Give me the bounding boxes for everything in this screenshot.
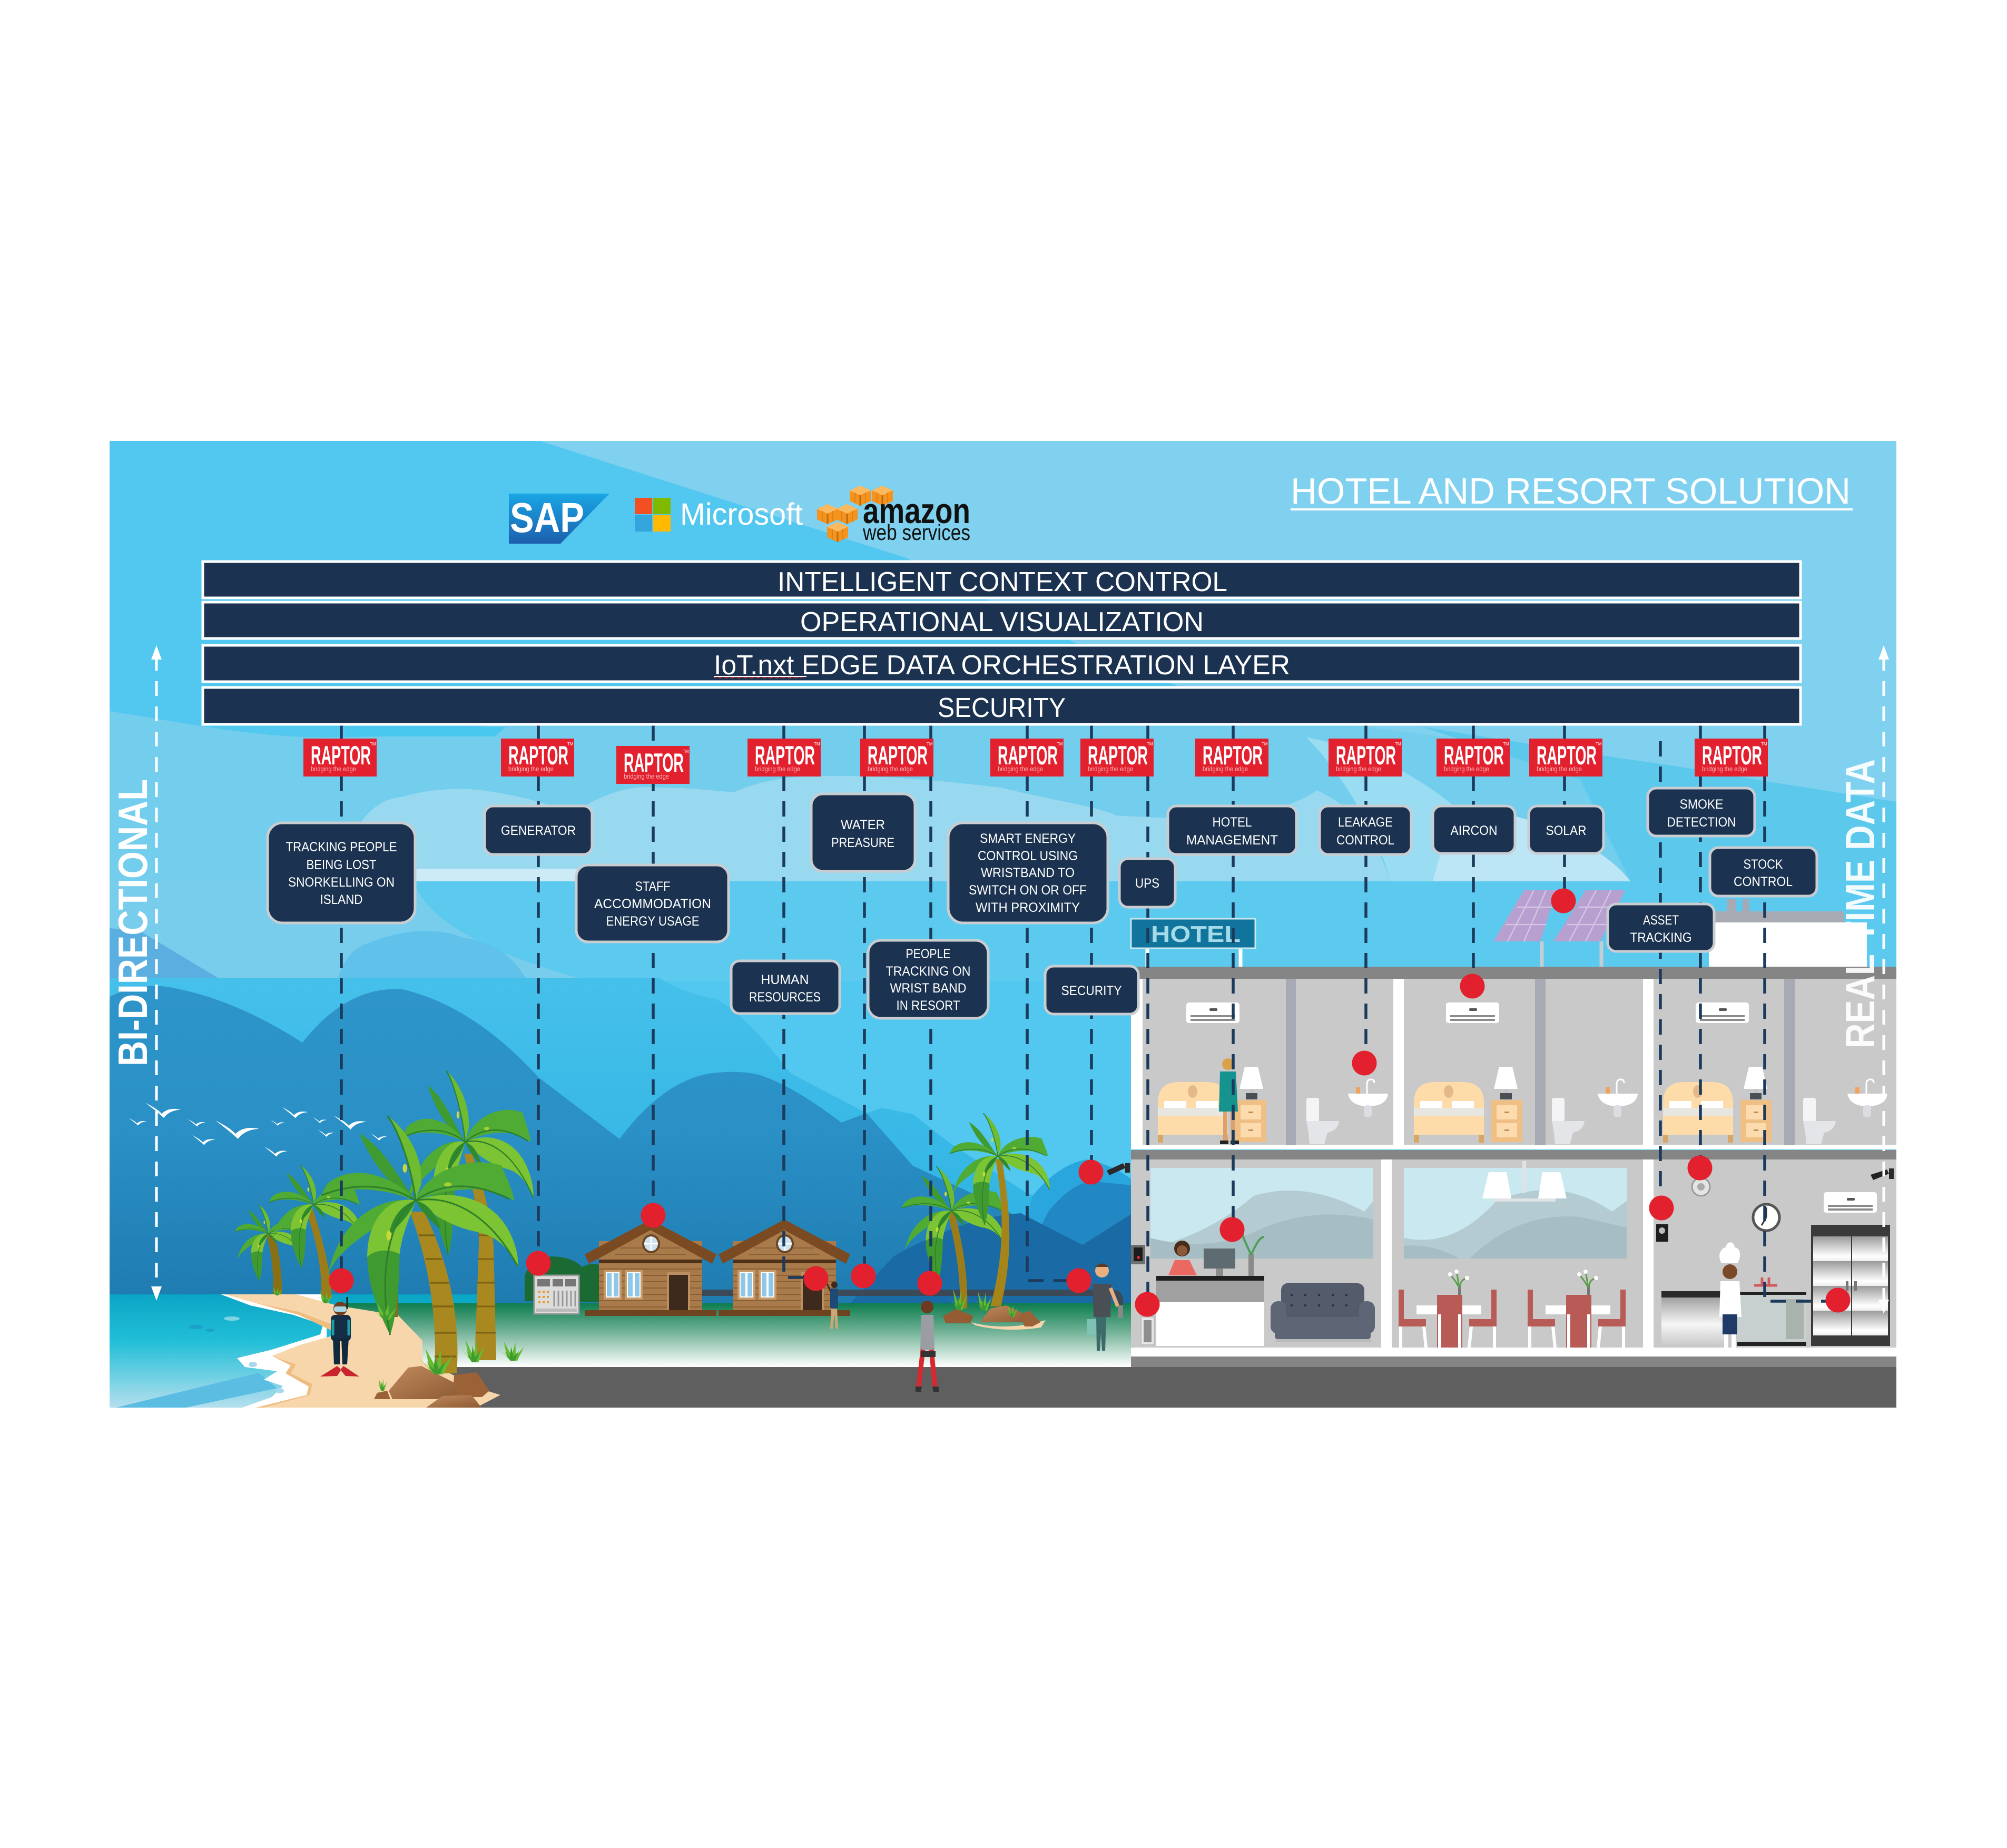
- label: smart energy control: CONTROL USING: [978, 849, 1078, 863]
- dining tables: [1399, 1270, 1626, 1348]
- badge: raptor leakage: RAPTOR: [1336, 741, 1396, 770]
- infographic: hotel and resort solution: [110, 441, 1896, 1408]
- label: asset tracking: [1608, 904, 1714, 951]
- label: staff accommodation: ENERGY USAGE: [606, 914, 700, 929]
- label: asset tracking: ASSET: [1643, 913, 1679, 928]
- label: smoke detection: DETECTION: [1667, 815, 1736, 830]
- ground: [337, 1303, 1133, 1367]
- badge: raptor hotel management: [1195, 739, 1268, 776]
- sky: [110, 441, 1896, 1195]
- layer: edge data orchestration: IoT.nxt EDGE DATA ORCHESTRATION LAYER: [714, 650, 1290, 681]
- clock: [1753, 1204, 1779, 1231]
- bi-directional arrow: [151, 645, 162, 1301]
- badge: raptor tracking: bridging the edge: [311, 765, 356, 773]
- badge: raptor aircon: RAPTOR: [1444, 741, 1504, 770]
- badge: raptor security: TM: [1147, 742, 1153, 746]
- road: [450, 1367, 1896, 1408]
- label: people tracking: PEOPLE: [906, 947, 950, 961]
- badge: raptor tracking: [303, 739, 377, 776]
- smoke detector: [1692, 1178, 1710, 1196]
- label: smart energy control: WRISTBAND TO: [981, 866, 1075, 880]
- logo: amazon web services: amazon: [863, 491, 970, 531]
- badge: raptor human resources: RAPTOR: [755, 741, 815, 770]
- badge: raptor solar: bridging the edge: [1537, 765, 1582, 773]
- hotel sign: HOTEL: [1151, 921, 1241, 947]
- label: stock control: CONTROL: [1734, 874, 1793, 889]
- connection lines: [341, 725, 1838, 1304]
- badge: raptor staff: RAPTOR: [624, 748, 684, 778]
- rocks and grass: [270, 1287, 1046, 1408]
- badge: raptor smoke: [1695, 739, 1768, 776]
- label: security: [1045, 966, 1138, 1014]
- lobby sofa: [1271, 1283, 1375, 1342]
- badge: raptor generator: bridging the edge: [508, 765, 554, 773]
- label: generator: GENERATOR: [501, 823, 576, 838]
- badge: raptor smart energy: [990, 739, 1064, 776]
- badge: raptor hotel management: TM: [1262, 742, 1268, 746]
- title: HOTEL AND RESORT SOLUTION: [1291, 470, 1851, 512]
- badge: raptor aircon: [1437, 739, 1510, 776]
- label: human resources: [731, 961, 840, 1014]
- badge: raptor hotel management: RAPTOR: [1203, 741, 1263, 770]
- badge: raptor smoke: bridging the edge: [1702, 765, 1747, 773]
- access reader: [1656, 1224, 1668, 1242]
- layer: security: SECURITY: [938, 693, 1066, 723]
- badge: raptor water: TM: [927, 742, 933, 746]
- label: people tracking: [868, 940, 988, 1018]
- person: snorkeller: [320, 1297, 359, 1377]
- badge: raptor security: [1080, 739, 1154, 776]
- label: stock control: [1710, 848, 1817, 896]
- label: smart energy control: [948, 823, 1108, 923]
- security cameras: [1107, 1163, 1894, 1180]
- reception desk: [1156, 1276, 1264, 1346]
- layer: operational visualization: OPERATIONAL VISUALIZATION: [800, 607, 1204, 637]
- label: staff accommodation: STAFF: [635, 879, 670, 894]
- layer: intelligent context control: [203, 562, 1801, 598]
- rooftop plant room: [1709, 899, 1867, 967]
- badge: raptor smart energy: TM: [1057, 742, 1063, 746]
- badge: raptor security: bridging the edge: [1088, 765, 1133, 773]
- badge: raptor generator: TM: [567, 742, 574, 746]
- badge: raptor aircon: bridging the edge: [1444, 765, 1489, 773]
- label: hotel management: MANAGEMENT: [1186, 833, 1278, 848]
- badge: raptor water: RAPTOR: [868, 741, 928, 770]
- label: security: SECURITY: [1061, 984, 1122, 998]
- label: human resources: HUMAN: [761, 972, 809, 987]
- badge: raptor staff: bridging the edge: [624, 772, 669, 780]
- layer: operational visualization: [203, 602, 1801, 638]
- badge: raptor aircon: TM: [1503, 742, 1509, 746]
- label: generator: [485, 806, 592, 854]
- access panel: [1131, 1245, 1145, 1264]
- badge: raptor solar: RAPTOR: [1537, 741, 1597, 770]
- badge: raptor human resources: [747, 739, 821, 776]
- badge: raptor smoke: RAPTOR: [1702, 741, 1762, 770]
- badge: raptor human resources: bridging the edge: [755, 765, 800, 773]
- badge: raptor human resources: TM: [814, 742, 820, 746]
- guest rooms: [1158, 1002, 1887, 1144]
- layer: edge data orchestration: [203, 645, 1801, 682]
- label: staff accommodation: ACCOMMODATION: [594, 897, 711, 911]
- label: water pressure: [811, 794, 915, 871]
- label: solar: SOLAR: [1546, 823, 1587, 838]
- logo: SAP: SAP: [510, 494, 584, 541]
- person: small man in resort: [826, 1281, 838, 1329]
- label: UPS: UPS: [1135, 876, 1159, 891]
- generator: [525, 1256, 600, 1314]
- badge: raptor smart energy: RAPTOR: [998, 741, 1058, 770]
- heading: real-time data: REAL-TIME DATA: [1837, 759, 1883, 1048]
- label: leakage control: CONTROL: [1336, 833, 1394, 848]
- palm trees: [235, 1071, 1050, 1373]
- badge: raptor tracking: TM: [370, 742, 376, 746]
- person: walker with wristband: [916, 1301, 939, 1392]
- accommodation huts: [585, 1220, 850, 1316]
- badge: raptor staff: [616, 746, 690, 784]
- label: UPS: [1119, 859, 1175, 907]
- label: people tracking: WRIST BAND: [890, 981, 966, 996]
- badge: raptor leakage: TM: [1395, 742, 1401, 746]
- label: people tracking: TRACKING ON: [886, 964, 970, 979]
- birds: [129, 1103, 387, 1157]
- label: solar: [1529, 806, 1603, 853]
- mountains: [110, 978, 1133, 1306]
- hotel building: [1131, 967, 1896, 1367]
- badge: raptor security: RAPTOR: [1088, 741, 1148, 770]
- wall air conditioner: [1824, 1192, 1877, 1213]
- label: water pressure: PREASURE: [831, 835, 894, 850]
- label: leakage control: [1320, 806, 1411, 854]
- label: tracking people: [268, 823, 415, 923]
- label: asset tracking: TRACKING: [1630, 930, 1692, 945]
- panel: resort scene: [110, 441, 1896, 1408]
- badge: raptor leakage: [1329, 739, 1402, 776]
- label: water pressure: WATER: [841, 818, 885, 832]
- badge: raptor solar: TM: [1596, 742, 1602, 746]
- label: human resources: RESOURCES: [749, 990, 821, 1005]
- person: housekeeper: [1219, 1058, 1239, 1144]
- label: tracking people: SNORKELLING ON: [288, 875, 395, 890]
- badge: raptor tracking: RAPTOR: [311, 741, 371, 770]
- logo: Microsoft: Microsoft: [680, 497, 803, 532]
- badge: raptor hotel management: bridging the edge: [1203, 765, 1248, 773]
- label: hotel management: [1168, 806, 1296, 854]
- label: tracking people: BEING LOST: [307, 858, 376, 872]
- badge: raptor generator: [501, 739, 574, 776]
- label: stock control: STOCK: [1744, 857, 1783, 872]
- label: people tracking: IN RESORT: [897, 998, 960, 1013]
- layer: security: [203, 687, 1801, 724]
- label: smart energy control: SWITCH ON OR OFF: [969, 883, 1087, 898]
- label: tracking people: TRACKING PEOPLE: [286, 840, 397, 854]
- badge: raptor smart energy: bridging the edge: [998, 765, 1043, 773]
- badge: raptor solar: [1529, 739, 1602, 776]
- label: hotel management: HOTEL: [1213, 815, 1252, 830]
- sensor points: [329, 888, 1850, 1317]
- logo: amazon web services: web services: [862, 520, 970, 545]
- logo: amazon web services: [817, 486, 970, 545]
- badge: raptor water: [860, 739, 933, 776]
- person: guest with shopping bag: [1087, 1263, 1123, 1351]
- beach: [221, 1294, 500, 1408]
- badge: raptor leakage: bridging the edge: [1336, 765, 1381, 773]
- pipe: [702, 1290, 1123, 1312]
- label: smoke detection: SMOKE: [1679, 797, 1724, 812]
- label: smoke detection: [1648, 788, 1755, 836]
- chandelier: [1482, 1161, 1567, 1200]
- chef: [1719, 1242, 1742, 1348]
- label: tracking people: ISLAND: [320, 892, 362, 907]
- badge: raptor generator: RAPTOR: [508, 741, 568, 770]
- label: aircon: [1433, 806, 1515, 853]
- receptionist and monitor: [1168, 1233, 1264, 1276]
- lobby windows: [1150, 1168, 1627, 1259]
- label: leakage control: LEAKAGE: [1338, 815, 1393, 830]
- UPS unit: [1141, 1317, 1154, 1345]
- real-time data arrow: [1878, 645, 1889, 1314]
- solar panels: [1493, 890, 1625, 967]
- label: staff accommodation: [576, 865, 729, 942]
- badge: raptor water: bridging the edge: [868, 765, 913, 773]
- kitchen: [1661, 1277, 1806, 1346]
- badge: raptor smoke: TM: [1761, 742, 1767, 746]
- label: smart energy control: WITH PROXIMITY: [976, 900, 1080, 915]
- label: aircon: AIRCON: [1451, 823, 1497, 838]
- fridge: [1811, 1225, 1890, 1346]
- sea: [110, 1294, 478, 1408]
- badge: raptor staff: TM: [683, 749, 689, 754]
- hotel sign: [1131, 919, 1255, 967]
- label: smart energy control: SMART ENERGY: [980, 831, 1076, 846]
- layer: intelligent context control: INTELLIGENT CONTEXT CONTROL: [778, 567, 1227, 597]
- heading: bi-directional: BI-DIRECTIONAL: [110, 779, 156, 1066]
